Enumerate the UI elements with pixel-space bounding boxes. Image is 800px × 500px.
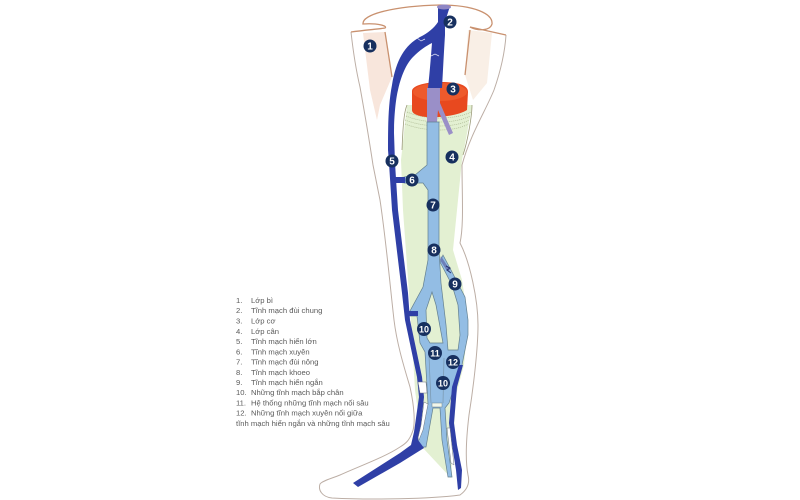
superficial and deep vein system	[404, 122, 468, 477]
marker 10 lower	[436, 376, 450, 390]
great saphenous vein	[353, 6, 450, 487]
short saphenous connection	[440, 256, 450, 271]
marker 9: 9	[452, 280, 458, 290]
marker 4	[446, 150, 458, 164]
skin ring at top of thigh	[351, 5, 506, 77]
marker 2: 2	[447, 18, 453, 28]
marker 7: 7	[430, 200, 436, 212]
marker 4: 4	[449, 152, 455, 164]
legend list: Hệ thống những tĩnh mạch nối sâu	[251, 398, 369, 408]
marker 3: 3	[450, 84, 456, 96]
legend list: 2.	[236, 306, 242, 315]
marker 5	[386, 154, 398, 168]
legend list: Lớp cơ	[251, 316, 275, 326]
thigh skin shading	[363, 30, 492, 120]
legend list: tĩnh mạch hiển ngắn và những tĩnh mạch sâu	[236, 419, 390, 428]
legend list: 10.	[236, 388, 247, 397]
calf tube edge lines	[429, 356, 444, 403]
marker 10 upper: 10	[419, 324, 429, 334]
marker 12	[446, 355, 460, 369]
marker 10 lower: 10	[438, 378, 448, 388]
marker 2	[444, 16, 456, 28]
deep vein in muscle	[427, 88, 453, 135]
marker 11	[428, 346, 442, 360]
marker 1	[364, 40, 376, 52]
legend list: 12.	[236, 408, 247, 418]
fascia layer	[401, 105, 472, 478]
legend list: Tĩnh mạch khoeo	[251, 368, 310, 377]
legend list: Tĩnh mạch xuyên	[251, 348, 310, 356]
legend list: Lớp cân	[251, 327, 279, 336]
numbered markers	[364, 16, 462, 390]
legend list: Tĩnh mạch đùi nông	[251, 358, 319, 366]
legend list: 8.	[236, 368, 242, 377]
marker 8: 8	[431, 246, 437, 256]
marker 5: 5	[389, 156, 395, 168]
legend list	[236, 296, 390, 428]
legend list: 9.	[236, 378, 242, 387]
marker 8	[428, 244, 440, 256]
skin outline	[320, 32, 506, 499]
vein valve gap	[432, 403, 442, 407]
small saphenous vein	[449, 365, 463, 490]
marker 7	[426, 198, 440, 212]
marker 9	[448, 278, 462, 290]
perforator links	[394, 177, 418, 316]
marker 6	[406, 174, 418, 186]
fascia dotted band	[405, 112, 471, 130]
marker 10 upper	[417, 322, 431, 336]
legend list: 11.	[236, 398, 246, 408]
leg illustration	[320, 4, 506, 499]
marker 6: 6	[409, 176, 415, 186]
vein valve marks	[417, 38, 439, 56]
marker 3	[446, 82, 460, 96]
marker 1: 1	[367, 42, 373, 52]
muscle layer	[412, 82, 468, 117]
fascia rim	[402, 105, 472, 155]
legend list: Tĩnh mạch hiển lớn	[251, 337, 317, 346]
legend list: 6.	[236, 348, 242, 356]
legend list: Tĩnh mạch đùi chung	[251, 306, 322, 315]
legend list: 3.	[236, 316, 242, 326]
legend list: 5.	[236, 337, 242, 346]
legend list: 4.	[236, 327, 242, 336]
legend list: 1.	[236, 296, 242, 305]
short saphenous notch	[446, 266, 451, 273]
legend list: 7.	[236, 358, 242, 366]
common femoral vein top	[437, 4, 451, 10]
legend list: Những tĩnh mạch xuyên nối giữa	[251, 408, 363, 418]
white valve strips	[418, 382, 454, 465]
marker 11: 11	[430, 348, 440, 358]
legend list: Tĩnh mạch hiển ngắn	[251, 378, 323, 387]
legend list: Lớp bì	[251, 296, 273, 305]
marker 12: 12	[448, 357, 458, 367]
legend list: Những tĩnh mạch bắp chân	[251, 388, 344, 397]
